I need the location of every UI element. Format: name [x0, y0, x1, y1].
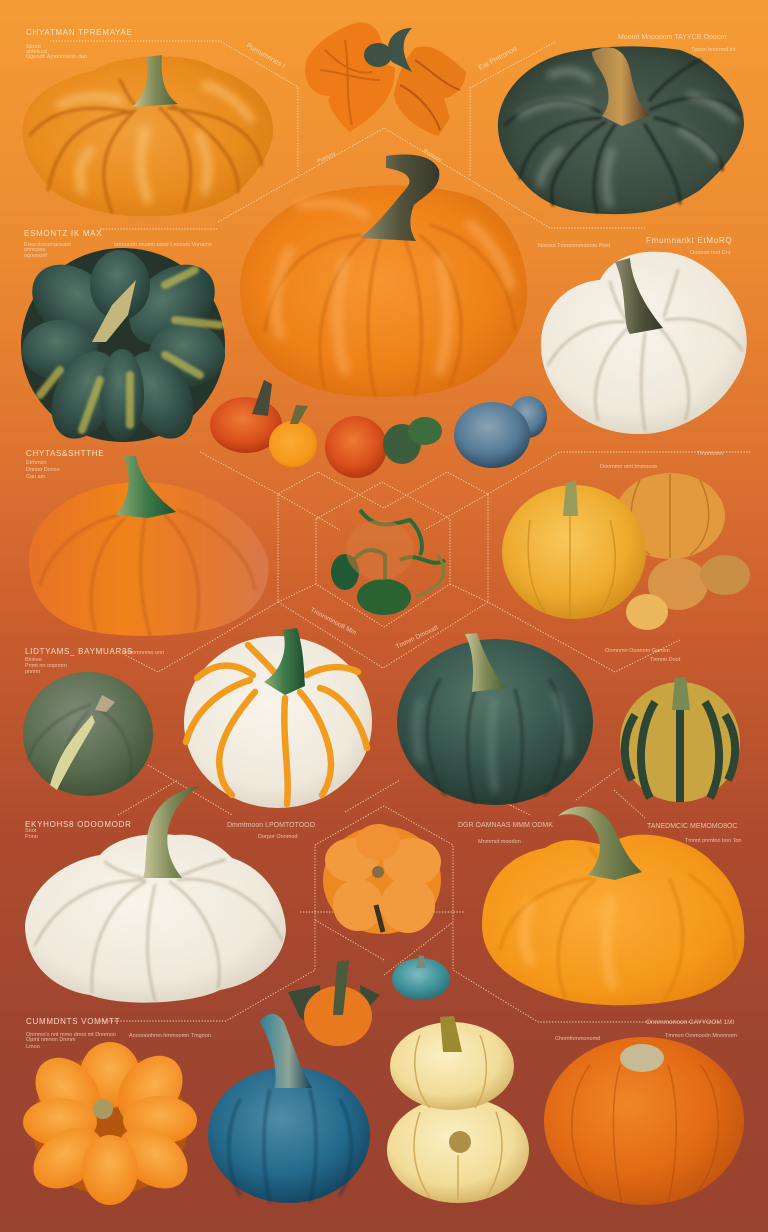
label: top centre diagonal: Pumumnnes I — [245, 42, 286, 70]
pumpkin: small orange with leaves — [288, 960, 380, 1046]
label: fifth centre: Dorpor Onnmod — [258, 834, 297, 840]
label: sixth left: CUMMDNTS VOMMTT — [26, 1017, 120, 1026]
back squash — [615, 473, 725, 559]
main gold pumpkin — [502, 480, 646, 619]
label: top left — [26, 28, 133, 60]
label: fifth left — [25, 820, 132, 840]
upper cream pumpkin — [390, 1016, 514, 1110]
label: hex right: Tmmm Dmoxatt — [395, 624, 440, 651]
label: fifth centre right — [458, 822, 553, 845]
label: fourth right — [605, 648, 681, 663]
pumpkin: white, right — [541, 252, 747, 434]
pumpkin: large white, lower left — [25, 786, 286, 1003]
label: third left: Can am — [26, 474, 46, 480]
label: sixth right — [555, 1019, 737, 1042]
label: fifth right: TANEDMCIC MEMOMO8OC — [647, 823, 737, 830]
label: upper diagonal right: Eat Pmtmnoo — [478, 46, 518, 72]
label: fourth left: Nmmmnnmo onn — [122, 650, 164, 656]
pumpkin: deep orange, bottom right — [544, 1037, 744, 1205]
label: second left: onmoodo onusm oooo Lnmoob Vonamo — [114, 242, 212, 248]
pumpkin: orange ribbed, top left — [23, 55, 273, 216]
label: fifth centre — [227, 822, 316, 840]
label: fifth right — [647, 823, 741, 844]
vine illustration, centre hexagon — [331, 510, 445, 615]
label: fifth left: EKYHOHS8 ODOOMODR — [25, 820, 132, 829]
label: top left: Sbord — [26, 44, 41, 50]
label: fifth left: Snot — [25, 828, 37, 834]
small pumpkin group — [210, 380, 547, 478]
small red pumpkin — [325, 416, 387, 478]
label: top left: Ogeodh Amononeon dan — [26, 54, 87, 60]
gold pumpkin cluster — [502, 473, 750, 630]
label: second left: Ereu donomaneam — [24, 242, 71, 248]
small orange pumpkin — [269, 405, 317, 467]
pumpkin: large orange, centre — [240, 154, 527, 397]
lower cream pumpkin — [387, 1097, 529, 1203]
label: third left: Dnnoo Doosn — [26, 467, 60, 473]
label: top left: CHYATMAN TPREMAYAE — [26, 28, 133, 37]
label: fifth centre right: DGR OAMNAAS MMM ODMK — [458, 822, 553, 829]
stacked cream pumpkins — [387, 1016, 529, 1203]
pumpkin: small orange flower shape — [323, 824, 441, 934]
label: third right: Tmnmomn — [697, 451, 723, 457]
label: second left: ogoooonf — [24, 253, 47, 259]
small green gourd — [383, 417, 442, 464]
label: fourth left: LIDTYAMS_ BAYMUAR3S — [25, 647, 133, 656]
label: third left: CHYTAS&SHTTHE — [26, 449, 104, 458]
label: fifth centre: Dmmtmoon LPOMTOTOOO — [227, 822, 316, 829]
label: third left: Etrhmsn — [26, 460, 46, 466]
label: top left: ohfelcod — [26, 49, 47, 55]
pumpkin: white with orange stripes — [184, 628, 372, 808]
label: fourth left — [25, 647, 164, 675]
label: sixth right: Onnmmonoon CAYYOOM 1MI — [646, 1019, 735, 1026]
dotted connector network — [50, 41, 750, 1022]
pumpkin: green round, left — [23, 672, 153, 796]
label: centre diagonal right: Pumuoy — [422, 148, 443, 164]
small slate blue pumpkin — [454, 396, 547, 468]
label: fifth centre right: Mnmmot moodon — [478, 839, 521, 845]
label: fourth right: Oomnmn Oonnnm Gamon — [605, 648, 670, 654]
label: top right: Moomt Mnoooom TAYYCR Oooom — [618, 34, 727, 41]
label: centre diagonal left: Pumuoy — [316, 151, 337, 165]
pumpkin: blue — [208, 1014, 370, 1203]
label: fifth right: Tmnnt pnmtoo bon Ton — [685, 838, 741, 844]
pumpkin: orange, mid left — [29, 456, 268, 636]
pumpkin: orange top view, bottom left — [22, 1042, 199, 1205]
label: fourth right: Tnmon Doot — [650, 657, 681, 663]
label: fourth left: Blokee — [25, 657, 42, 663]
pumpkin: dark green, centre — [397, 633, 593, 805]
label: second right: Noooot Tmnonmmoonm Pnnt — [538, 243, 611, 249]
pumpkin: dark green, top right — [498, 46, 744, 214]
label: sixth right: Chnmfnmmonomd — [555, 1036, 600, 1042]
pumpkin: mottled dark green, top view — [16, 248, 231, 449]
label: second right: Fmumnankt EtMoRQ — [646, 236, 732, 245]
label: fifth left: Pnnn — [25, 834, 38, 840]
label: third right — [600, 451, 723, 470]
label: sixth right: Tmmon Ommoodn Mnonnom — [665, 1033, 737, 1039]
small red-orange pumpkin — [210, 380, 282, 453]
label: sixth left: Aooooonhmn hmmoomn Tmgoon — [129, 1033, 211, 1039]
flower cluster — [305, 22, 466, 136]
label: third right: Doommn omt tmmooon — [600, 464, 657, 470]
label: second right: Oooooo tnot Dnt — [690, 250, 731, 256]
label: second right — [538, 236, 732, 256]
labels — [24, 28, 741, 1050]
pumpkin: striped green and yellow — [620, 677, 740, 802]
small gourds — [648, 558, 708, 610]
label: fourth left: pnnnn — [25, 669, 40, 675]
label: second left: onnepeo — [24, 247, 45, 253]
label: hex left: Tmnmmnoo8 Mm — [309, 607, 357, 637]
label: sixth left: Onmmn's nnt mmo dmnt mt Dnnmoo — [26, 1032, 116, 1038]
pumpkin: small teal — [392, 955, 450, 1000]
label: top right: Tpoon hnonmd tnt — [691, 47, 736, 53]
pumpkin: large yellow-orange, lower right — [482, 806, 744, 1005]
label: third left — [26, 449, 104, 480]
label: sixth left: Opmt nmnnn Dnmm — [26, 1037, 76, 1043]
label: fourth left: Pnmt nn oopnnm — [25, 663, 67, 669]
label: sixth left — [26, 1017, 211, 1050]
label: second left — [24, 229, 212, 259]
label: top right — [618, 34, 736, 53]
label: sixth left: Lmoo — [26, 1044, 40, 1050]
label: second left: ESMONTZ IK MAX — [24, 229, 102, 238]
